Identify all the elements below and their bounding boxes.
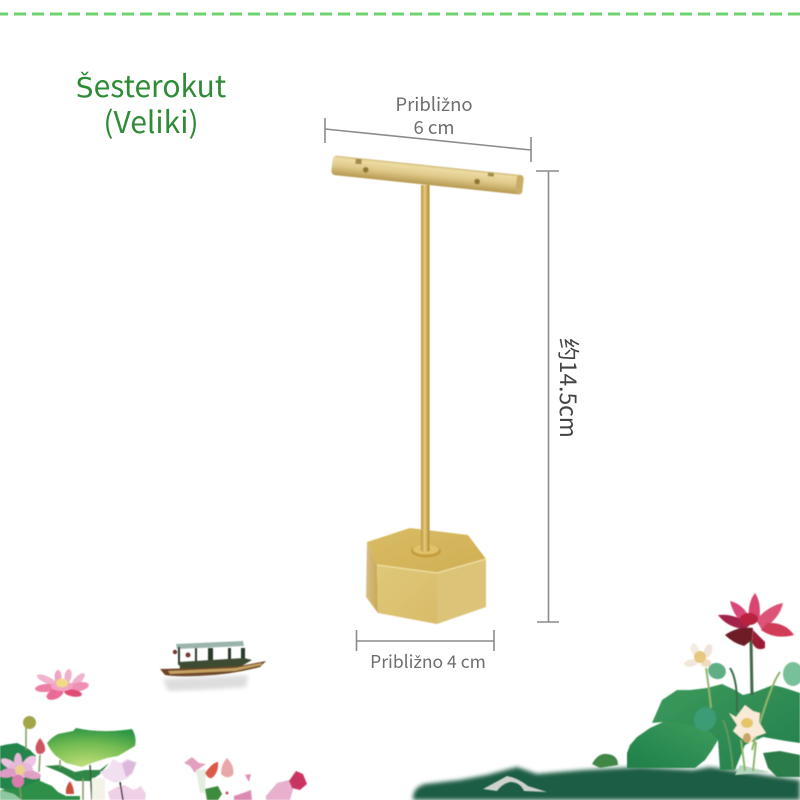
lotus cluster: bottom centre <box>184 757 307 800</box>
boat <box>160 641 266 691</box>
stems <box>706 640 780 771</box>
large light green leaf <box>47 728 136 767</box>
dark ink ground <box>413 767 800 800</box>
floating lotus flower <box>35 668 90 702</box>
top bar width dimension: Približno <box>395 91 473 117</box>
dark under leaf <box>45 763 109 781</box>
white flower lower <box>729 705 766 744</box>
T bar <box>331 155 524 195</box>
title <box>76 62 226 142</box>
top bar width dimension <box>325 91 531 162</box>
buds <box>36 738 45 754</box>
pale flowers <box>100 759 146 800</box>
bush <box>592 754 618 768</box>
red lotus <box>718 593 794 649</box>
seed pod <box>23 716 36 729</box>
top dashed border <box>0 12 800 16</box>
stem <box>421 185 430 545</box>
base width dimension <box>356 630 494 674</box>
stone bridge <box>483 776 547 792</box>
lower leaf <box>0 780 80 800</box>
earring stand <box>331 155 524 624</box>
white flower upper <box>683 642 714 668</box>
lotus cluster: bottom right <box>413 593 800 800</box>
small right leaf <box>763 751 800 777</box>
back leaf <box>652 684 800 770</box>
lotus cluster: bottom left <box>0 716 146 800</box>
title: Šesterokut <box>76 62 226 106</box>
height dimension: 约14.5cm <box>553 338 586 438</box>
seed pods <box>691 660 800 734</box>
front leaf <box>627 722 718 768</box>
pink flower <box>0 753 41 788</box>
lotus leaves and flowers <box>627 593 800 777</box>
dark leaf left <box>0 743 40 795</box>
title: (Veliki) <box>103 98 199 142</box>
base width dimension: Približno 4 cm <box>370 649 486 674</box>
top bar width dimension: 6 cm <box>414 114 454 140</box>
hexagonal base <box>366 528 486 624</box>
